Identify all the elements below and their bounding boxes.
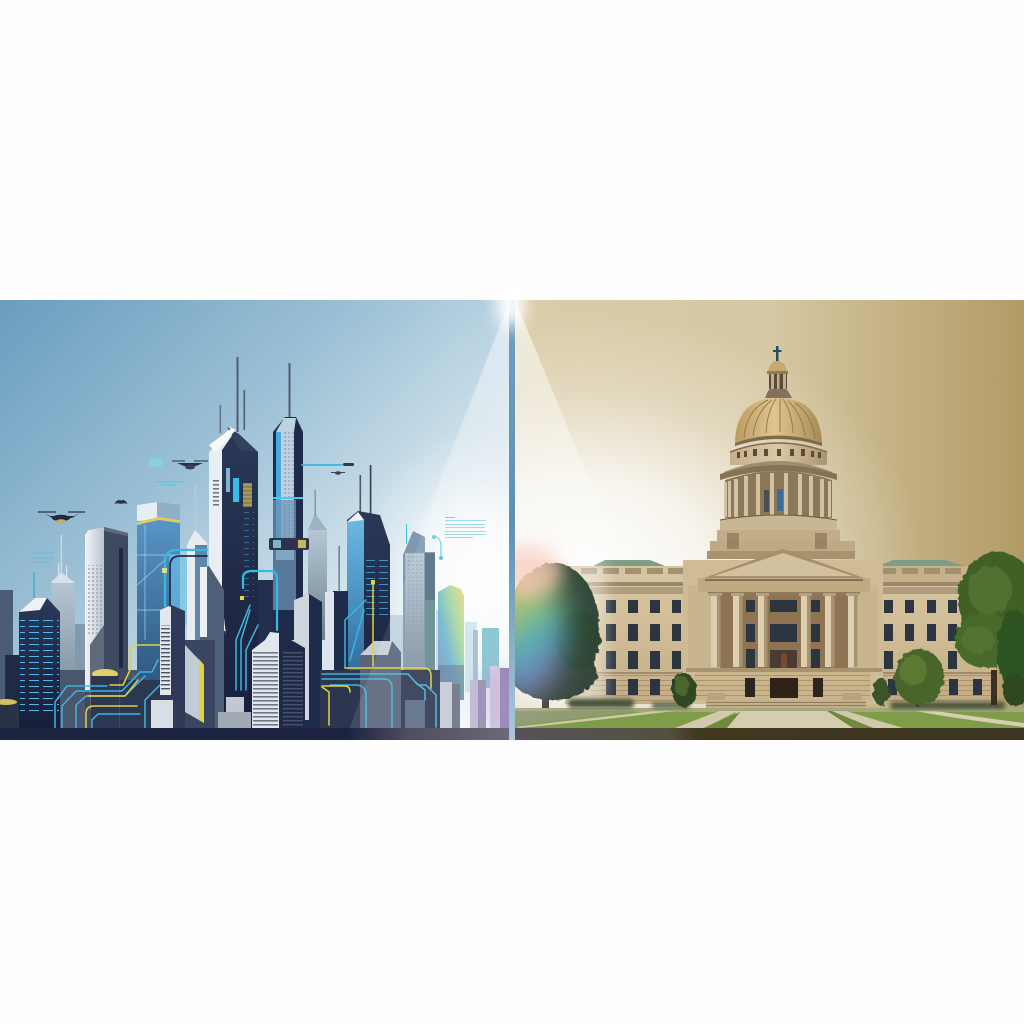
right wing: [878, 582, 996, 704]
drum base: [707, 515, 855, 559]
city tower with two antennas: [347, 465, 390, 670]
background skyline: [0, 490, 499, 728]
foreground towers: [120, 546, 510, 728]
capitol dome: [707, 346, 855, 559]
large tree right: [955, 552, 1024, 706]
icon: large drone: [38, 512, 85, 523]
light beam: [420, 300, 612, 560]
panel: classical capitol: [515, 300, 1024, 740]
warm sky gradient: [515, 300, 1024, 708]
lantern: [765, 361, 792, 398]
attic drum: [720, 442, 837, 480]
rainbow tinted tower: [438, 585, 464, 700]
small tree right of steps: [873, 649, 944, 707]
glass tower right: [403, 524, 435, 670]
central divider: [497, 281, 525, 740]
sky gradient: [0, 300, 509, 728]
pediment: [698, 549, 870, 594]
recessed bay: [720, 594, 848, 669]
ground band left: [0, 728, 510, 740]
rainbow light flare: [485, 544, 565, 700]
prism light overlay: [350, 517, 509, 728]
entrance steps: [706, 693, 866, 708]
lawn and paths: [515, 708, 1024, 728]
panel: futuristic city: [0, 300, 509, 740]
dark data tower: [0, 572, 60, 728]
rusticated base and doors: [686, 668, 882, 700]
white slim tower: [185, 485, 224, 728]
left wing: [565, 582, 685, 704]
columns: [709, 593, 859, 667]
colonnade: [724, 471, 832, 518]
holographic data panels: [33, 458, 486, 563]
cyan spire tower: [269, 363, 309, 640]
central portico: [683, 549, 883, 708]
central walkway: [725, 711, 853, 728]
icon: small drone: [115, 500, 127, 504]
cross finial: [773, 346, 782, 361]
side wing roofs: [568, 560, 968, 582]
circuit lines: [55, 465, 436, 728]
blue glass tower: [137, 502, 187, 680]
ribbed dome: [735, 398, 822, 446]
hedges: [568, 699, 1005, 709]
small tree left of steps: [672, 673, 696, 707]
large tree left: [507, 563, 600, 708]
portico windows: [746, 600, 820, 670]
icon: drone above tower: [172, 461, 208, 470]
tall central tower: [209, 357, 258, 728]
white tower: [85, 527, 128, 728]
ground band right: [515, 728, 1024, 740]
aerial vehicle with data trail: [303, 463, 354, 466]
wash over left wing: [540, 560, 605, 705]
icon: drone at right: [331, 471, 345, 475]
